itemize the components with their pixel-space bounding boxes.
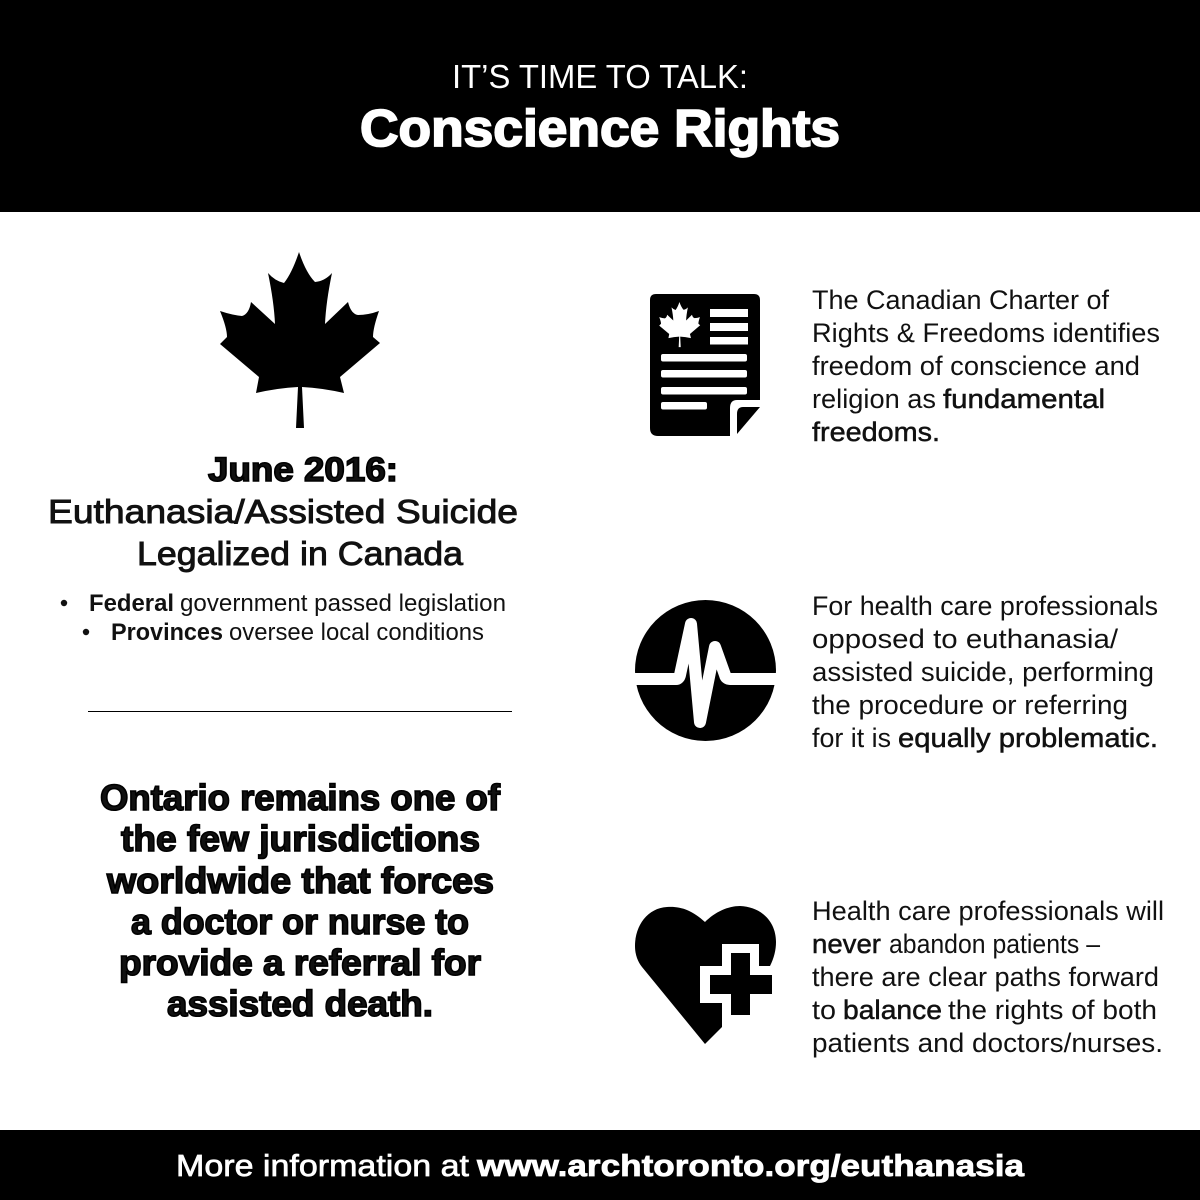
bullet list: Provinces	[111, 619, 223, 646]
callout: Ontario statement	[100, 777, 501, 1024]
footer link text: www.archtoronto.org/euthanasia	[476, 1148, 1025, 1183]
text: never abandon: Health care professionals will	[812, 896, 1164, 926]
footer link text	[176, 1148, 1025, 1183]
text: charter: Rights & Freedoms identifies	[812, 318, 1160, 348]
text: opposed: opposed to euthanasia/	[812, 624, 1119, 654]
text: never abandon: to	[812, 995, 836, 1025]
callout: Ontario statement: a doctor or nurse to	[131, 901, 469, 942]
title: Conscience Rights	[360, 100, 840, 158]
heading: euthanasia legalized: Legalized in Canada	[137, 535, 464, 572]
text: never abandon: balance	[843, 995, 942, 1025]
text: opposed: assisted suicide, performing	[812, 657, 1154, 687]
icon: charter document	[650, 294, 760, 436]
bullet list: Federal	[89, 590, 174, 617]
heading: euthanasia legalized: Euthanasia/Assisted Suicide	[48, 493, 518, 530]
footer band	[0, 1130, 1200, 1200]
icon: heart with cross	[635, 906, 776, 1044]
icon: heartbeat	[634, 600, 777, 741]
bullet list: oversee local conditions	[229, 619, 484, 646]
text: charter: freedom of conscience and	[812, 351, 1140, 381]
bullet list	[61, 590, 506, 646]
text: never abandon: abandon patients –	[889, 929, 1100, 959]
text: opposed: the procedure or referring	[812, 690, 1128, 720]
text: opposed	[812, 591, 1158, 753]
bullet list: government passed legislation	[180, 590, 506, 617]
callout: Ontario statement: worldwide that forces	[106, 860, 494, 901]
panel: left column	[48, 252, 518, 1024]
callout: Ontario statement: assisted death.	[167, 983, 433, 1024]
panel: health care professionals	[634, 591, 1158, 753]
text: charter: freedoms.	[812, 417, 940, 447]
title kicker: IT’S TIME TO TALK:	[452, 58, 748, 95]
text: never abandon: the rights of both	[948, 995, 1157, 1025]
callout: Ontario statement: Ontario remains one of	[100, 777, 501, 818]
text: never abandon: patients and doctors/nurses.	[812, 1028, 1163, 1058]
text: never abandon	[812, 896, 1164, 1058]
text: never abandon: never	[812, 929, 881, 959]
icon: maple leaf	[220, 252, 380, 428]
header band	[0, 0, 1200, 212]
heading: June 2016: June 2016:	[208, 451, 398, 489]
text: opposed: equally problematic.	[898, 723, 1158, 753]
text: opposed: For health care professionals	[812, 591, 1158, 621]
text: charter	[812, 285, 1160, 447]
footer link text: More information at	[176, 1148, 469, 1183]
text: charter: religion as	[812, 384, 936, 414]
text: charter: fundamental	[943, 384, 1105, 414]
callout: Ontario statement: the few jurisdictions	[121, 818, 480, 859]
callout: Ontario statement: provide a referral for	[119, 942, 481, 983]
panel: never abandon	[635, 896, 1164, 1058]
text: charter: The Canadian Charter of	[812, 285, 1109, 315]
text: opposed: for it is	[812, 723, 891, 753]
heading: euthanasia legalized	[48, 493, 518, 572]
panel: charter	[650, 285, 1160, 447]
text: never abandon: there are clear paths forward	[812, 962, 1159, 992]
